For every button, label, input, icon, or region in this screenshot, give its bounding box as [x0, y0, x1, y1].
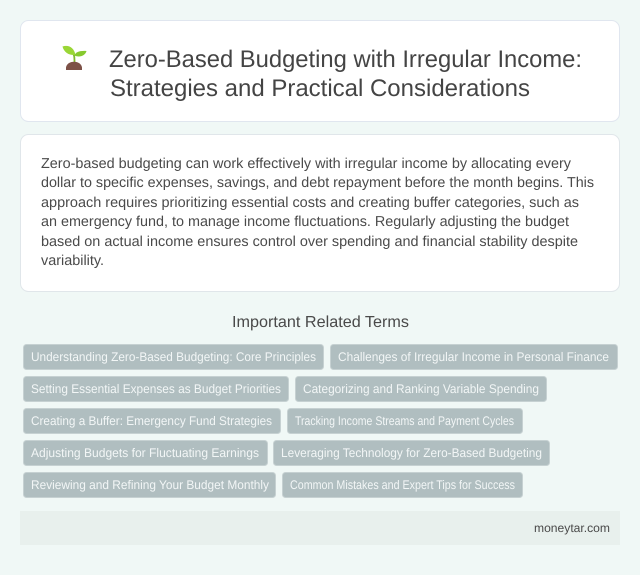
tag: variable spending — [296, 376, 546, 402]
tag: common mistakes — [282, 472, 522, 498]
title — [109, 46, 582, 102]
summary text: variability. — [41, 253, 104, 269]
summary text: an emergency fund, to manage income fluctuations. Regularly adjusting the budget — [41, 214, 569, 230]
tag: common mistakes: Common Mistakes and Expert Tips for Success — [290, 478, 515, 492]
footer — [20, 511, 620, 545]
panel: related term tags — [24, 344, 618, 498]
panel: header card — [20, 20, 620, 122]
tag: technology — [274, 440, 550, 466]
tag: monthly review — [24, 472, 276, 498]
tag: emergency fund — [24, 408, 280, 434]
tag: fluctuating earnings: Adjusting Budgets for Fluctuating Earnings — [31, 446, 259, 460]
tag: emergency fund: Creating a Buffer: Emergency Fund Strategies — [31, 414, 272, 428]
tag: essential expenses — [24, 376, 288, 402]
title: Zero-Based Budgeting with Irregular Income: — [109, 46, 582, 73]
tag: technology: Leveraging Technology for Zero-Based Budgeting — [281, 446, 542, 460]
summary text: dollar to specific expenses, savings, and debt repayment before the month begins. This — [41, 175, 594, 191]
tag: core principles — [24, 344, 324, 370]
tag: irregular income challenges — [330, 344, 618, 370]
tag: core principles: Understanding Zero-Based Budgeting: Core Principles — [31, 350, 316, 364]
summary text: based on actual income ensures control over spending and financial stability despite — [41, 234, 578, 250]
summary text — [41, 156, 594, 269]
panel: summary card — [20, 134, 620, 292]
heading: related terms: Important Related Terms — [232, 314, 409, 331]
summary text: Zero-based budgeting can work effectively with irregular income by allocating every — [41, 156, 572, 172]
tag: irregular income challenges: Challenges of Irregular Income in Personal Finance — [338, 350, 609, 364]
footer source text: moneytar.com — [534, 521, 610, 535]
tag: variable spending: Categorizing and Ranking Variable Spending — [303, 382, 539, 396]
tag: income streams — [288, 408, 522, 434]
icon: seedling — [62, 46, 86, 70]
title: Strategies and Practical Considerations — [110, 75, 530, 102]
tag: monthly review: Reviewing and Refining Your Budget Monthly — [31, 478, 270, 492]
tag: fluctuating earnings — [24, 440, 268, 466]
tag: essential expenses: Setting Essential Expenses as Budget Priorities — [31, 382, 281, 396]
tag: income streams: Tracking Income Streams and Payment Cycles — [295, 414, 514, 428]
summary text: approach requires prioritizing essential costs and creating buffer categories, such as — [41, 195, 579, 211]
